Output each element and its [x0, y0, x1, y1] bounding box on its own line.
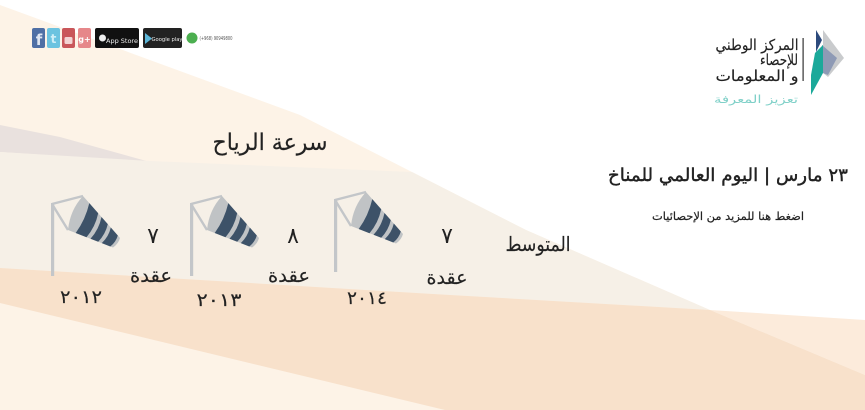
year 2012: ٢٠١٢	[60, 287, 102, 308]
icon: youtube	[62, 28, 75, 48]
icon: windsock 2014	[334, 192, 403, 272]
logo	[714, 30, 844, 106]
heading: world meteorological day: ٢٣ مارس | اليوم العالمي للمناخ	[608, 165, 848, 186]
unit 2012: عقدة	[130, 265, 172, 287]
unit 2014: عقدة	[426, 267, 468, 289]
value 2012: ٧	[147, 224, 159, 249]
item: 2013	[190, 196, 310, 311]
icon: google plus: g+	[78, 35, 91, 44]
phone number: (+968) 90949800	[200, 36, 232, 42]
year 2014: ٢٠١٤	[347, 288, 387, 309]
logo name: و المعلومات	[716, 67, 798, 85]
link text: more statistics: اضغط هنا للمزيد من الإحصائيات	[652, 210, 804, 223]
logo tagline: تعزيز المعرفة	[714, 93, 798, 106]
social and app links	[32, 28, 232, 49]
badge: google play	[143, 28, 182, 48]
heading: wind speed: سرعة الرياح	[212, 130, 328, 156]
icon: windsock 2012	[51, 196, 120, 276]
logo divider	[802, 38, 804, 81]
unit 2013: عقدة	[268, 265, 310, 287]
item: 2012	[51, 196, 172, 308]
icon: whatsapp	[186, 32, 198, 44]
icon: windsock 2013	[190, 196, 259, 276]
icon: google plus	[78, 28, 91, 48]
value 2013: ٨	[287, 224, 299, 249]
icon: facebook: f	[36, 31, 43, 49]
logo mark	[811, 30, 844, 95]
value 2014: ٧	[441, 224, 453, 249]
year 2013: ٢٠١٣	[196, 290, 242, 311]
label: average: المتوسط	[506, 232, 570, 256]
icon: twitter: t	[51, 32, 57, 46]
badge: app store	[95, 28, 139, 48]
icon: facebook	[32, 28, 45, 49]
badge: app store: App Store	[106, 37, 138, 45]
logo name	[716, 36, 798, 85]
icon: twitter	[47, 28, 60, 48]
logo name: للإحصاء	[760, 51, 798, 69]
logo name: المركز الوطني	[716, 36, 798, 55]
item: 2014	[334, 192, 468, 309]
badge: google play: Google play	[152, 37, 182, 43]
